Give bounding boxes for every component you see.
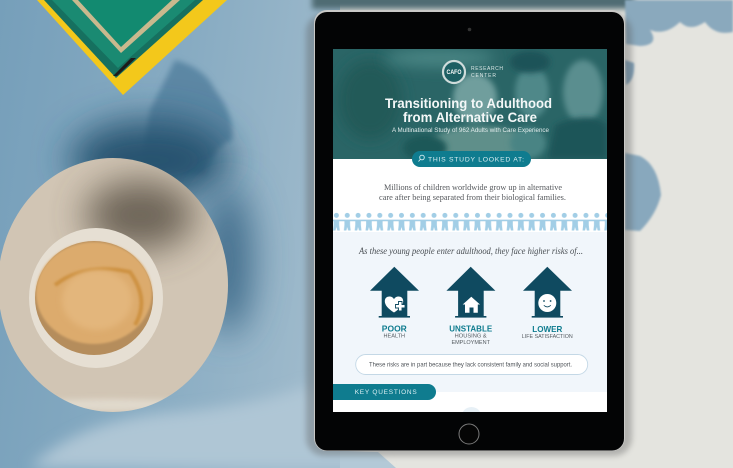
water stain and cup shadow [70, 60, 252, 335]
risk: lower life satisfaction: LOWER [532, 324, 562, 334]
intro text [379, 184, 566, 202]
risk: unstable housing and employment [446, 267, 495, 346]
subtitle: A Multinational Study of 962 Adults with Care Experience [392, 128, 550, 134]
risks intro line: As these young people enter adulthood, they face higher risks of... [358, 246, 583, 256]
coffee saucer [0, 158, 228, 412]
arrow house icon with heart [370, 267, 419, 318]
title: Transitioning to Adulthood [385, 96, 552, 111]
risk: lower life satisfaction: LIFE SATISFACTION [522, 334, 573, 340]
risk: unstable housing and employment: EMPLOYMENT [451, 340, 491, 346]
book [37, 0, 227, 95]
risks section background [333, 232, 607, 392]
logo: CAFO Research Center [443, 61, 503, 83]
callout pill: These risks are in part because they lack consistent family and social support. [369, 362, 572, 368]
title: from Alternative Care [403, 110, 537, 125]
logo: CAFO Research Center: RESEARCH [471, 66, 503, 72]
risk: poor health: POOR [382, 323, 407, 333]
intro text: Millions of children worldwide grow up in alternative [384, 182, 562, 192]
home button [459, 424, 479, 444]
next section icon top [463, 407, 480, 412]
risk: unstable housing and employment: UNSTABLE [449, 323, 493, 333]
white lower section [333, 392, 607, 412]
arrow house icon with smiley [523, 267, 572, 318]
risk: poor health [370, 267, 419, 340]
tablet screen infographic [333, 49, 607, 427]
coffee cup [29, 228, 163, 368]
tablet frame [306, 10, 632, 456]
header photo of family [333, 49, 607, 166]
title [385, 98, 552, 122]
row of paper-chain people [333, 212, 607, 232]
pill heading: this study looked at [412, 151, 531, 167]
logo: CAFO Research Center: CAFO [446, 70, 462, 76]
intro text: care after being separated from their biological families. [379, 192, 566, 202]
logo: CAFO Research Center: CENTER [471, 73, 496, 79]
callout pill [356, 354, 588, 374]
pill heading: key questions: KEY QUESTIONS [355, 389, 417, 396]
risk: poor health: HEALTH [384, 334, 405, 340]
risk: lower life satisfaction [522, 267, 573, 340]
arrow house icon with home [446, 267, 495, 318]
pill heading: this study looked at: THIS STUDY LOOKED AT: [428, 157, 524, 164]
camera [468, 28, 471, 31]
risk: unstable housing and employment: HOUSING & [455, 334, 487, 340]
pill heading: key questions [333, 384, 436, 400]
